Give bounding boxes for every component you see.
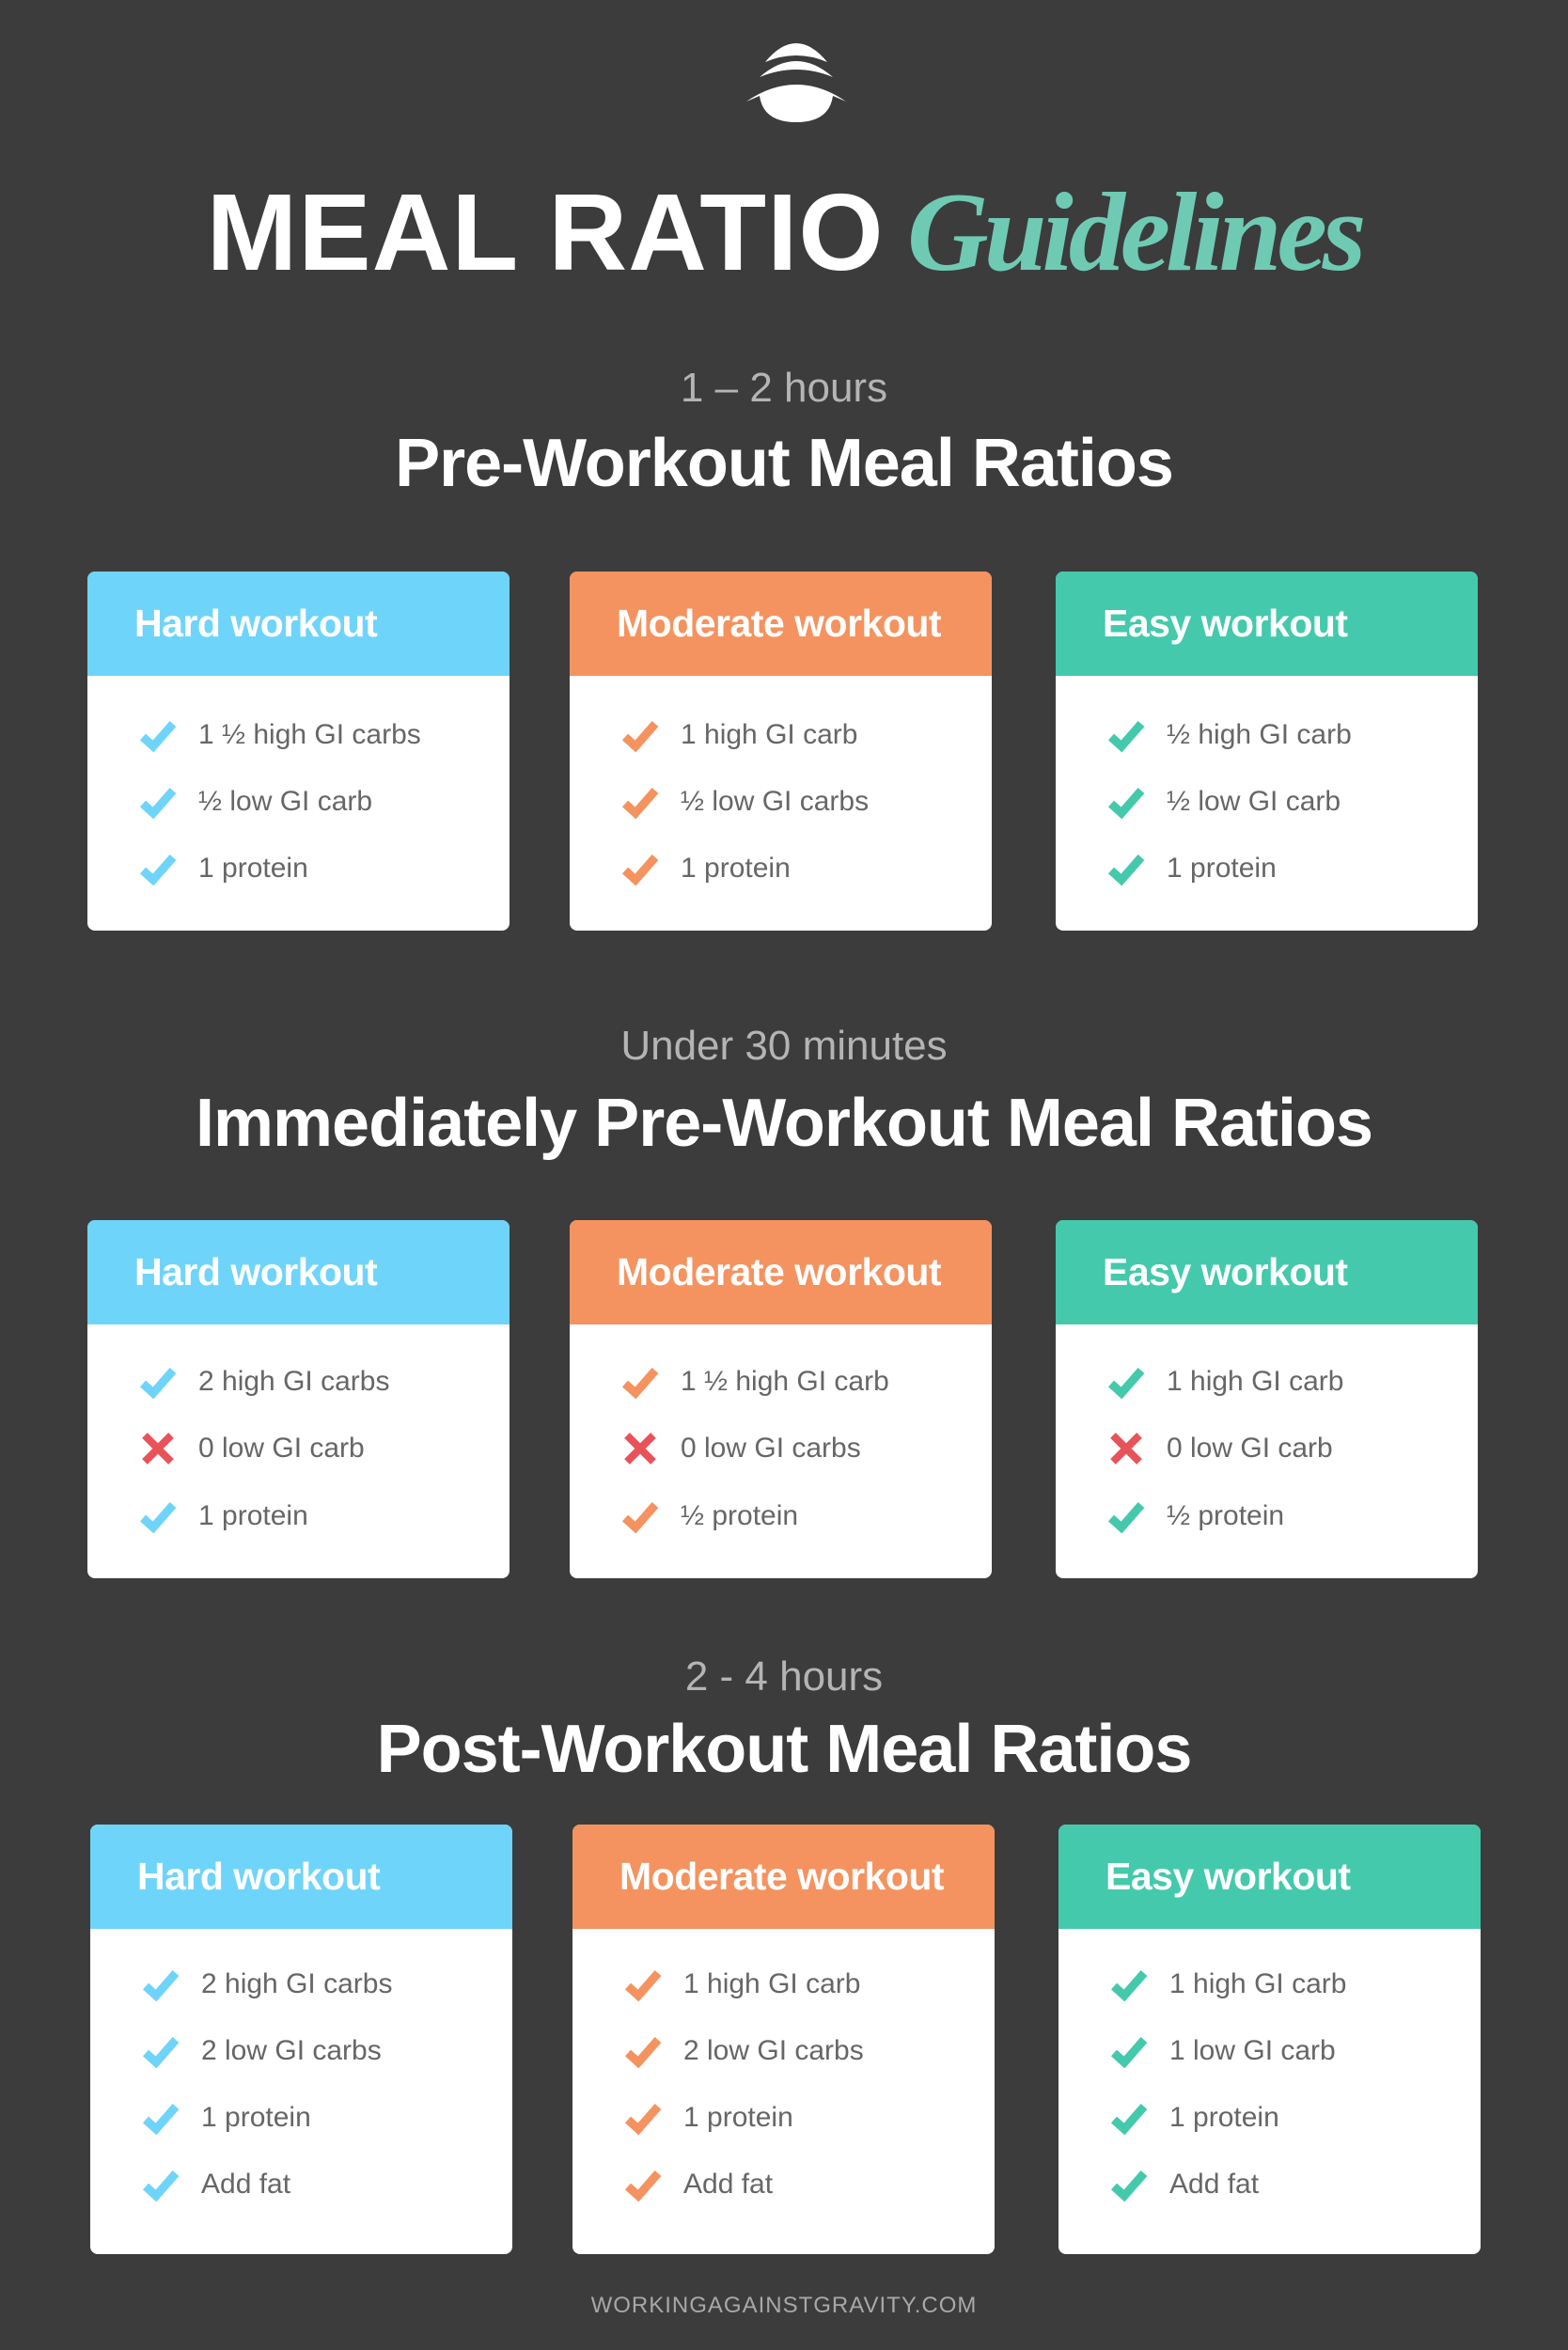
section 2 subtitle: Under 30 minutes	[620, 1023, 948, 1069]
footer: WORKINGAGAINSTGRAVITY.COM	[591, 2293, 977, 2318]
card: pre hard: Hard workout	[134, 602, 377, 645]
card: immediate hard	[87, 1220, 510, 1578]
section 1 heading: Pre-Workout Meal Ratios	[395, 426, 1173, 501]
card: post hard: 2 low GI carbs	[201, 2035, 382, 2066]
card: post moderate: 2 low GI carbs	[683, 2035, 864, 2066]
card: post hard	[90, 1825, 512, 2254]
card: pre moderate: 1 high GI carb	[681, 719, 857, 750]
card: post easy: 1 protein	[1169, 2102, 1279, 2133]
card: immediate moderate: 1 ½ high GI carb	[681, 1366, 889, 1397]
card: pre hard: 1 protein	[198, 853, 308, 884]
title: MEAL RATIO Guidelines	[207, 169, 1361, 294]
card: post hard: Add fat	[201, 2169, 290, 2200]
card: immediate easy: Easy workout	[1103, 1250, 1348, 1293]
card: post easy: Easy workout	[1105, 1855, 1351, 1898]
card: pre hard	[87, 572, 510, 931]
logo	[746, 43, 846, 122]
card: pre easy	[1056, 572, 1478, 931]
card: immediate hard: 2 high GI carbs	[198, 1366, 389, 1397]
card: pre easy: ½ high GI carb	[1167, 719, 1352, 750]
card: pre moderate	[570, 572, 992, 931]
card: pre easy: 1 protein	[1167, 853, 1277, 884]
card: post easy: 1 high GI carb	[1169, 1968, 1346, 1999]
card: immediate moderate	[570, 1220, 992, 1578]
card: post hard: 2 high GI carbs	[201, 1968, 392, 1999]
card: post moderate: 1 protein	[683, 2102, 793, 2133]
card: post moderate: Add fat	[683, 2169, 773, 2200]
card: post moderate: 1 high GI carb	[683, 1968, 860, 1999]
card: pre easy: ½ low GI carb	[1167, 786, 1341, 817]
card: immediate hard: Hard workout	[134, 1250, 377, 1293]
card: immediate hard: 1 protein	[198, 1500, 308, 1531]
card: immediate moderate: 0 low GI carbs	[681, 1433, 861, 1464]
card: immediate easy	[1056, 1220, 1478, 1578]
card: pre moderate: 1 protein	[681, 853, 791, 884]
card: post hard: Hard workout	[137, 1855, 380, 1898]
section 3 heading: Post-Workout Meal Ratios	[377, 1712, 1191, 1787]
card: pre hard: 1 ½ high GI carbs	[198, 719, 421, 750]
card: immediate easy: 0 low GI carb	[1167, 1433, 1333, 1464]
card: immediate moderate: ½ protein	[681, 1500, 798, 1531]
card: pre moderate: ½ low GI carbs	[681, 786, 869, 817]
card: immediate easy: 1 high GI carb	[1167, 1366, 1343, 1397]
card: post easy: Add fat	[1169, 2169, 1259, 2200]
section 1 subtitle: 1 – 2 hours	[681, 365, 887, 411]
card: immediate easy: ½ protein	[1167, 1500, 1284, 1531]
card: pre hard: ½ low GI carb	[198, 786, 372, 817]
card: post hard: 1 protein	[201, 2102, 311, 2133]
card: pre easy: Easy workout	[1103, 602, 1348, 645]
card: post moderate	[572, 1825, 995, 2254]
card: post easy	[1058, 1825, 1481, 2254]
section 2 heading: Immediately Pre-Workout Meal Ratios	[196, 1086, 1372, 1161]
card: post easy: 1 low GI carb	[1169, 2035, 1336, 2066]
section 3 subtitle: 2 - 4 hours	[685, 1653, 883, 1700]
card: pre moderate: Moderate workout	[617, 602, 941, 645]
card: immediate hard: 0 low GI carb	[198, 1433, 365, 1464]
card: immediate moderate: Moderate workout	[617, 1250, 941, 1293]
card: post moderate: Moderate workout	[619, 1855, 944, 1898]
